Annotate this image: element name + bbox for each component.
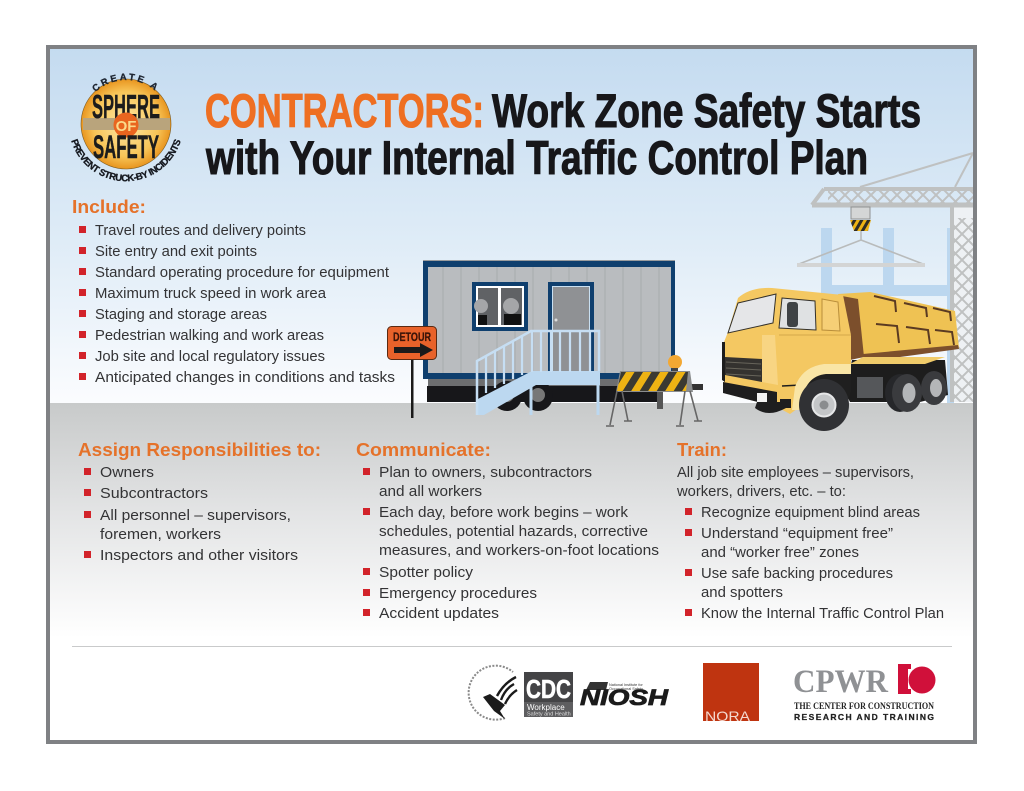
text block: Include list: Standard operating procedure for equipment — [95, 265, 389, 281]
text block: Train: Train: — [677, 440, 727, 460]
title: with Your Internal Traffic Control Plan — [205, 131, 868, 184]
text block: Include list: Travel routes and delivery points — [95, 223, 306, 239]
logo: NIOSH — [580, 682, 669, 710]
logo: CDC Workplace Safety and Health: Safety and Health — [527, 712, 571, 718]
text block: Communicate: and all workers — [379, 484, 482, 500]
truck dump body — [838, 292, 959, 364]
logo: Sphere of Safety badge — [71, 73, 180, 182]
truck front wheel — [799, 379, 849, 431]
logo: NIOSH: Occupational Safety — [609, 687, 643, 691]
text block: Communicate: Accident updates — [379, 606, 499, 622]
text block: Communicate: measures, and workers-on-foot locations — [379, 543, 659, 559]
text block: Train: workers, drivers, etc. – to: — [676, 484, 846, 500]
logo: CDC Workplace Safety and Health: Workplace — [527, 703, 565, 712]
text block: Train: Use safe backing procedures — [701, 566, 893, 582]
illustration: site trailer — [423, 260, 675, 415]
text block: Communicate: schedules, potential hazards, corrective — [379, 524, 648, 540]
text block: Include list: Job site and local regulatory issues — [95, 349, 325, 365]
text block: Include list: Anticipated changes in conditions and tasks — [95, 370, 395, 386]
title — [205, 84, 921, 184]
logo: Sphere of Safety badge: CREATE A — [92, 73, 157, 91]
text block: Assign Responsibilities: Owners — [100, 465, 154, 481]
text block: Train: Know the Internal Traffic Control Plan — [701, 606, 944, 622]
logo: HHS eagle — [469, 666, 517, 720]
illustration: tower crane — [797, 153, 974, 402]
text block: Communicate — [356, 440, 659, 622]
logo: CPWR — [793, 664, 936, 722]
text block: Train — [676, 440, 944, 622]
text block: Include list: Include: — [72, 197, 146, 217]
text block: Assign Responsibilities: Inspectors and other visitors — [100, 548, 298, 564]
icon: detour sign — [388, 326, 436, 418]
logo: CPWR: CPWR — [793, 664, 889, 700]
trailer window — [472, 282, 528, 331]
text block: Assign Responsibilities: foremen, workers — [100, 527, 221, 543]
title: Work Zone Safety Starts — [492, 84, 921, 137]
truck rear wheels — [885, 371, 947, 412]
logo: NIOSH: National Institute for — [609, 683, 644, 687]
text block: Assign Responsibilities: All personnel – supervisors, — [100, 508, 291, 524]
text block: Train: and spotters — [701, 585, 783, 601]
icon: road barricade — [606, 355, 703, 426]
text block: Assign Responsibilities: Assign Responsibilities to: — [78, 440, 321, 460]
trailer door — [548, 282, 594, 371]
page frame and background — [48, 47, 975, 742]
logo: CPWR: RESEARCH AND TRAINING — [794, 712, 934, 722]
text block: Include list — [72, 197, 395, 386]
text block: Communicate: Each day, before work begins – work — [379, 505, 629, 521]
text block: Assign Responsibilities — [78, 440, 321, 564]
logo: Sphere of Safety badge: PREVENT STRUCK-BY INCIDENTS — [71, 138, 180, 182]
truck chassis — [845, 360, 948, 402]
text block: Include list: Site entry and exit points — [95, 244, 257, 260]
logo: NIOSH: NIOSH — [580, 685, 669, 710]
text block: Communicate: Communicate: — [356, 440, 491, 460]
truck cab — [722, 288, 851, 414]
trailer stairs — [476, 331, 600, 415]
logo: CPWR: THE CENTER FOR CONSTRUCTION — [794, 701, 934, 711]
logo: CDC Workplace Safety and Health: CDC — [526, 674, 571, 704]
text block: Train: All job site employees – supervisors, — [677, 465, 914, 481]
text block: Include list: Pedestrian walking and work areas — [95, 328, 324, 344]
logo: CDC Workplace Safety and Health — [524, 672, 573, 718]
logo: Sphere of Safety badge: SAFETY — [93, 129, 159, 165]
logo: NORA — [703, 663, 759, 724]
illustration: building under construction — [821, 228, 954, 403]
title: CONTRACTORS: — [205, 84, 484, 137]
icon: detour sign: DETOUR — [393, 330, 431, 344]
text block: Train: Recognize equipment blind areas — [701, 505, 920, 521]
text block: Communicate: Spotter policy — [379, 565, 474, 581]
text block: Include list: Staging and storage areas — [95, 307, 267, 323]
logo: Sphere of Safety badge: OF — [116, 118, 136, 135]
text block: Train: and “worker free” zones — [701, 545, 859, 561]
text block: Communicate: Emergency procedures — [379, 586, 537, 602]
text block: Include list: Maximum truck speed in work area — [95, 286, 327, 302]
illustration: yellow dump truck — [722, 288, 959, 431]
logo: Sphere of Safety badge: SPHERE — [92, 88, 160, 125]
text block: Assign Responsibilities: Subcontractors — [100, 486, 208, 502]
logo: NORA: NORA — [705, 708, 751, 724]
text block: Train: Understand “equipment free” — [701, 526, 893, 542]
text block: Communicate: Plan to owners, subcontractors — [379, 465, 592, 481]
